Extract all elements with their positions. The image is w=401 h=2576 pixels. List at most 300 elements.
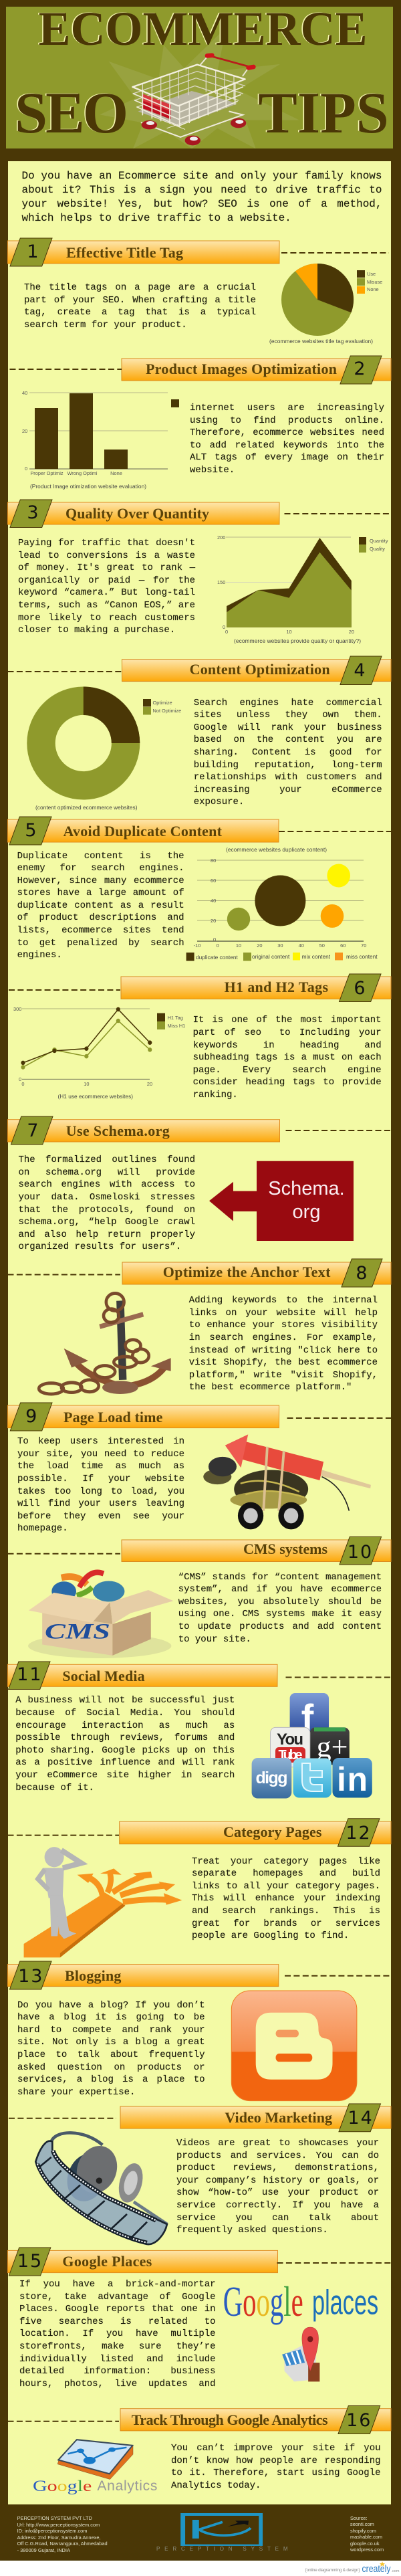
tip 4 text: increasing your eCommerce [194,785,382,795]
image: rusty anchor [39,1293,171,1394]
area chart: Quantity [370,538,388,544]
bubble chart: 30 [277,943,283,949]
number 10 [340,1537,382,1565]
bar chart: 0 [25,466,27,472]
bubble chart: 40 [299,943,304,949]
bubble chart: original content [252,953,290,960]
heading: Category Pages [223,1823,322,1840]
intro text: about it? This is a sign you need to drive traffic to [21,184,382,196]
tip 11 text: A business will not be successful just [15,1695,235,1706]
tip 11 text: encourage interaction as much as [15,1720,235,1731]
tip 3 text: Paying for traffic that doesn't [18,538,195,549]
panel: tip 7 use schema.org [7,1116,390,1252]
bubble chart: 60 [340,943,346,949]
tip 15 text: hours, photos, live updates and [19,2379,216,2389]
tip 3 text: of money. It's great to rank — [18,563,195,573]
banner 4 [122,656,391,685]
image: cms box [28,1573,173,1658]
intro text: your website! Yes, but how? SEO is one of a method, [21,198,382,210]
number 16 [338,2405,380,2434]
tip 11 graphics [7,1662,390,1798]
bar chart: Wrong Optimi [67,470,98,476]
number 2: 2 [354,359,366,379]
panel: tip 8 optimize the anchor text [8,1259,392,1395]
icons: social networks [252,1693,372,1798]
logo: google places: Google [223,2278,303,2325]
footer sources: wordpress.com [350,2547,384,2553]
area chart: Quality [370,546,385,552]
tip 3 text: more likely to reach customers [18,613,195,623]
line chart: 0 [21,1081,24,1087]
panel: tip 11 social media [7,1662,390,1798]
footer sources: gloople.co.uk [350,2541,380,2547]
tip 5 text: stores have a large amount of [17,888,184,898]
tip 4 text: exposure. [194,797,244,807]
number 11 [9,1662,50,1690]
footer contact details: PERCEPTION SYSTEM PVT LTD [17,2515,92,2521]
tip 7 text: your data. Osmeloski stresses [19,1192,195,1203]
number 9: 9 [25,1406,37,1427]
footer contact details: - 380009 Gujarat, INDIA [17,2547,70,2553]
tip 10 text: to update products and add content [178,1621,382,1632]
tip 14 text: service correctly. If you have a [176,2200,379,2211]
banner 11 [8,1662,277,1690]
credit tagline: [online diagramming & design] [305,2568,360,2573]
bubble chart: mix content [302,953,331,960]
icon: linkedin: in [337,1761,368,1798]
number 1 [10,238,52,266]
tip 4 text: relationships with customers and [194,772,382,783]
tip 15 text: location. If you have multiple [19,2329,216,2339]
tip 4 text: sharing. Content is good for [194,747,382,758]
tip 8 text: to enhance your stores visibility [189,1320,378,1330]
heading: Page Load time [63,1409,163,1425]
tip 7 text: and also help return properly [19,1229,195,1240]
heading: Blogging [65,1967,121,1984]
tip 1 text: The title tags on a page are a crucial [24,282,256,293]
number 5 [9,817,51,845]
tip 12 graphics [8,1818,392,1957]
tip 14 text: your company’s history or goals, or [176,2175,379,2186]
tip 14 text: show “how-to” use your product or [176,2187,379,2198]
tip 15 text: five searches is related to [19,2316,216,2327]
icon: youtube: g+ [317,1730,348,1763]
header illustration: shopping cart [100,34,299,148]
tip 3 text: lead to conversions is a waste [18,551,195,561]
icon: facebook [290,1693,329,1739]
heading: Use Schema.org [66,1122,170,1139]
bar chart: 20 [22,428,27,434]
pie chart: Misuse [367,279,382,285]
banner 2 [122,356,391,384]
icon: digg [252,1758,291,1798]
tip 13 text: have a blog it is going to be [17,2012,205,2023]
area chart: 0 [225,629,228,635]
number 14 [339,2104,381,2132]
number 9 [10,1403,52,1431]
area chart: 20 [349,629,354,635]
tip 4 text [194,698,382,807]
tip 10 text: to your site. [178,1634,251,1645]
bullet square [171,399,179,407]
icon: blogger [231,1991,357,2101]
number 1: 1 [27,241,39,262]
tip 6 text: consider heading tags to provide [193,1077,382,1088]
tip 3 text [18,538,195,635]
creately wordmark: .com [392,2569,400,2573]
number 16: 16 [346,2410,372,2431]
tip 13 text [17,1999,205,2098]
footer logo [154,2504,291,2561]
banner 5 [8,817,279,845]
number 8: 8 [356,1263,368,1284]
tip 12 text: separate homepages and build [192,1868,380,1879]
tip 15 text: storefronts, make sure they’re [19,2341,216,2352]
tip 9 text [17,1436,184,1534]
icon: twitter [293,1758,331,1798]
tip 15 text: Places. Google reports that one in [19,2304,216,2314]
tip 13 text: share your expertise. [17,2087,135,2098]
tip 9 text: will find your users leaving [17,1498,184,1509]
panel: tip 1 effective title tag [7,238,389,344]
number 3 [10,500,52,527]
tip 6 text: It is one of the most important [193,1015,382,1025]
bar chart: 40 [22,390,27,396]
banner 9 [8,1403,279,1431]
tip 4 text: based on the content you are [194,734,382,745]
tip 9 text: homepage. [17,1523,68,1534]
tip 16 graphics [0,2404,401,2504]
image: cms box: CMS [45,1620,110,1644]
image: turtle with rocket [203,1434,371,1529]
tip 5 text: engines. [17,950,62,961]
bubble chart: 20 [211,918,216,924]
tip 12 text: This will enhance your indexing [192,1893,380,1904]
panel: tip 6 h1 and h2 tags [9,974,392,1100]
tip 16 text: Analytics today. [171,2480,261,2491]
number 13 [9,1961,51,1989]
footer contact details: ID: info@perceptionsystem.com [17,2528,87,2534]
tip 14 text: frequently asked questions. [176,2225,328,2236]
tip 3 text: organically or paid — for the [18,575,195,586]
bubble chart: 40 [211,898,216,904]
panel: tip 5 avoid duplicate content [7,816,391,961]
tip 9 text: possible. If your website [17,1474,184,1484]
creately credit artwork [0,2561,401,2576]
tip 7 text: search engines with access to [19,1179,195,1190]
tip 13 text: place to talk about frequently [17,2050,205,2060]
tip 15 graphics [0,2246,401,2404]
tip 8 text: Adding keywords to the internal [189,1295,378,1306]
number 4 [340,656,382,685]
tip 14 text: products and services. You can do [176,2151,379,2161]
heading: Product Images Optimization [146,361,337,377]
panel: tip 16 track through google analytics [0,2404,401,2504]
footer [0,2504,401,2561]
bubble chart: 50 [319,943,325,949]
logo: google places: places [312,2283,378,2322]
banner 1 [8,238,279,266]
footer logo: PERCEPTION SYSTEM [156,2546,288,2552]
tip 4 text: sites unless they own them. [194,710,382,720]
panel: tip 13 blogging [7,1961,389,2102]
footer sources [350,2515,384,2553]
icon: youtube: Tube [278,1748,302,1763]
number 7 [11,1116,53,1145]
heading: CMS systems [243,1541,327,1557]
schema.org arrow callout: org [293,1201,320,1223]
tip 2 text: using to find products online. [190,415,384,426]
tip 7 text: The formalized outlines found [19,1155,195,1165]
banner 15 [8,2248,278,2276]
tip 14 graphics [0,2102,401,2246]
number 12 [338,1819,380,1846]
panel: tip 9 page load time [7,1402,391,1534]
tip 13 graphics [7,1961,389,2102]
tip 11 text: because of Social Media. You should [15,1708,235,1718]
tip 13 text: services, a blog is a place to [17,2074,205,2085]
number 4: 4 [354,660,366,681]
tip 4 text: Search engines hate commercial [194,698,382,708]
tip 6 text: part of seo to Including your [193,1027,382,1038]
tip 8 text: visit Shopify, the best ecommerce [189,1357,378,1368]
tip 6 text: subheading tags is a must on each [193,1052,382,1063]
tip 15 text: store, take advantage of Google [19,2292,216,2302]
panel: tip 4 content optimization [8,656,392,811]
tip 10 text: system”, and if you have ecommerce [178,1584,382,1595]
intro text: which helps to drive traffic to a website. [21,212,291,224]
donut chart [35,686,181,811]
number 10: 10 [348,1542,373,1563]
heading: Track Through Google Analytics [132,2411,328,2428]
tip 16 text: to it. Therefore, start using Google [171,2468,381,2478]
banner 12 [120,1819,391,1846]
tip 3 graphics [7,499,389,644]
tip 9 text: before they even see your [17,1511,184,1522]
area chart: 200 [217,534,225,540]
bubble chart: 70 [361,943,366,949]
bubble chart: 60 [211,878,216,884]
tip 7 graphics [7,1116,390,1241]
title: SEO: SEO [15,81,126,146]
tip 5 text: lists, ecommerce sites tend [17,925,184,936]
tip 9 text: your site, you need to reduce [17,1449,184,1460]
tip 6 text: page. Every search engine [193,1065,382,1076]
line chart: 300 [13,1006,21,1012]
icon: digg: digg [255,1769,287,1787]
footer sources: Source: [350,2515,367,2520]
footer sources: mashable.com [350,2534,382,2540]
line chart [13,1006,185,1100]
line chart: H1 Tag [168,1015,183,1021]
banner 7 [8,1116,279,1145]
number 14: 14 [348,2108,374,2128]
tip 6 graphics [9,974,392,1100]
tip 1 text: search term for your product. [24,320,187,330]
tip 5 text: to get penalized by search [17,938,184,949]
tip 11 text: because of it. [15,1783,94,1793]
area chart: 0 [223,624,225,630]
tip 14 text [176,2137,379,2237]
tip 8 text: platform," write "visit Shopify, [189,1370,378,1381]
logo: google places [223,2278,378,2325]
footer contact details: Address: 2nd Floor, Samudra Annexe, [17,2535,100,2541]
heading: H1 and H2 Tags [225,979,328,995]
icon: store with map pin [282,2327,319,2381]
donut chart: (content optimized ecommerce websites) [35,804,138,811]
tip 5 text: duplicate content as a result [17,900,184,911]
tip 12 text: great for brands or services [192,1918,380,1929]
number 7: 7 [27,1120,39,1141]
number 5: 5 [25,820,37,841]
tip 11 text [15,1695,235,1793]
heading: Social Media [62,1668,145,1684]
bubble chart: duplicate content [196,954,238,961]
banner 14 [120,2104,391,2132]
tip 12 text: links to all your category pages. [192,1881,380,1892]
tip 8 graphics [8,1259,392,1395]
tip 12 text [192,1856,380,1941]
pie chart: None [367,286,379,292]
panel: tip 14 video marketing [0,2102,401,2246]
tip 1 graphics [7,238,389,344]
bubble chart: 20 [257,943,263,949]
tip 3 text: closer to making a purchase. [18,625,175,635]
tip 3 text: keyword “camera.” But long-tail [18,587,195,598]
tip 13 text: site. Not only is a blog a great [17,2037,205,2048]
banner 16 [120,2405,391,2434]
tip 2 graphics [9,356,392,490]
number 15 [9,2248,51,2276]
tip 5 text: of product descriptions and [17,912,184,923]
tip 15 text: individually listed and include [19,2354,216,2365]
tip 10 graphics [8,1536,392,1658]
creately wordmark: creately [362,2563,391,2575]
tip 12 text: and search rankings. This is [192,1906,380,1916]
tip 2 text: ALT tags of every image on their [190,452,384,463]
tip 9 text: takes too long to load, you [17,1486,184,1497]
tip 1 text: part of your SEO. When crafting a title [24,295,256,306]
tip 15 text [19,2278,216,2390]
tip 6 text: keywords in heading and [193,1040,382,1051]
footer contact details: Off C.G.Road, Navrangpura, Ahmedabad [17,2541,108,2547]
heading: Avoid Duplicate Content [63,823,223,839]
tip 16 text: don’t know how people are responding [171,2456,381,2466]
tip 11 text: as a positive influence and will rank [15,1757,235,1768]
tip 12 text: people are Googling to find. [192,1930,349,1941]
heading: Optimize the Anchor Text [163,1264,331,1280]
tip 14 text: product reviews, demonstrations, [176,2163,379,2173]
creately credit [0,2561,401,2576]
line chart: Miss H1 [168,1023,185,1029]
banner 13 [8,1961,279,1989]
tip 5 text: enemy for search engines. [17,863,184,874]
tip 7 text: on schema.org will provide [19,1167,195,1178]
tip 11 text: possible through reviews, forums and [15,1732,235,1743]
banner 6 [121,974,391,1002]
panel: tip 10 cms systems [8,1536,392,1658]
icon: youtube: You [277,1730,303,1749]
line chart: (H1 use ecommerce websites) [57,1093,133,1100]
number 11: 11 [17,1664,43,1685]
schema.org arrow callout: Schema. [268,1178,345,1199]
heading: Effective Title Tag [66,244,183,261]
header banner [6,7,393,148]
footer sources: seonti.com [350,2521,374,2527]
tip 11 text: photo sharing. Google picks up on this [15,1745,235,1756]
panel: tip 15 google places [0,2246,401,2404]
donut chart: Not Optimize [152,708,181,714]
heading: Quality Over Quantity [65,505,209,522]
tip 8 text: links on your website will help [189,1308,378,1318]
number 12: 12 [346,1823,372,1844]
line chart: 20 [147,1081,152,1087]
tip 12 text: Treat your category pages like [192,1856,380,1867]
tip 10 text: using one. CMS systems make it easy [178,1609,382,1619]
tip 2 text: internet users are increasingly [190,403,384,413]
tip 5 text: Duplicate content is the [17,851,184,862]
tip 8 text: the best ecommerce platform." [189,1382,352,1393]
tip 6 text: ranking. [193,1090,238,1100]
number 2 [340,356,382,384]
number 6: 6 [354,978,366,999]
tip 6 text [193,1015,382,1100]
number 8 [342,1259,382,1287]
tip 8 text: in search engines. For example, [189,1332,378,1343]
tip 4 graphics [8,656,392,811]
area chart: 10 [286,629,292,635]
tip 15 text: If you have a brick-and-mortar [19,2279,216,2290]
tip 7 text: organized results for users”. [19,1242,181,1252]
banner 8 [122,1259,391,1287]
tip 5 text [17,851,184,961]
bar chart [22,390,168,490]
tip 7 text: schema.org, “help Google crawl [19,1217,195,1227]
line chart: 0 [19,1076,21,1082]
bubble chart: 10 [236,943,241,949]
area chart: 150 [217,579,225,585]
number 15: 15 [17,2251,43,2272]
logo: google analytics: Google [33,2477,92,2494]
footer contact details: Url: http://www.perceptionsystem.com [17,2522,100,2528]
panel: tip 2 product images optimization [9,356,392,490]
heading: Content Optimization [190,661,330,678]
area chart: (ecommerce websites provide quality or quantity?) [234,637,361,644]
tip 2 text [190,403,384,476]
tip 13 text: asked question on products or [17,2062,205,2073]
panel: tip 12 category pages [8,1818,392,1957]
tip 8 text: instead of writing "click here to [189,1345,378,1356]
banner 10 [122,1537,391,1565]
tip 11 text: your eCommerce site higher in search [15,1770,235,1781]
line chart: 10 [84,1081,90,1087]
title: Tips: TIPS [258,81,389,146]
schema.org arrow callout [209,1161,354,1241]
panel: tip 3 quality over quantity [7,499,389,644]
tip 7 text [19,1155,195,1252]
bar chart: None [110,470,122,476]
tip 14 text: Videos are great to showcases your [176,2138,379,2149]
pie chart: (ecommerce websites title tag evaluation) [269,338,373,344]
tip 2 text: to add related keywords into the [190,440,384,451]
tip 5 text: However, since many ecommerce [17,876,184,886]
icon: youtube [270,1727,350,1767]
image: person at forked arrows [24,1847,182,1957]
logo: google analytics: Analytics [97,2478,157,2494]
bar chart: Proper Optimiz [30,470,63,476]
tip 3 text: terms, such as “Canon EOS,” are [18,600,195,611]
tip 7 text: that the protocols, found on [19,1205,195,1215]
